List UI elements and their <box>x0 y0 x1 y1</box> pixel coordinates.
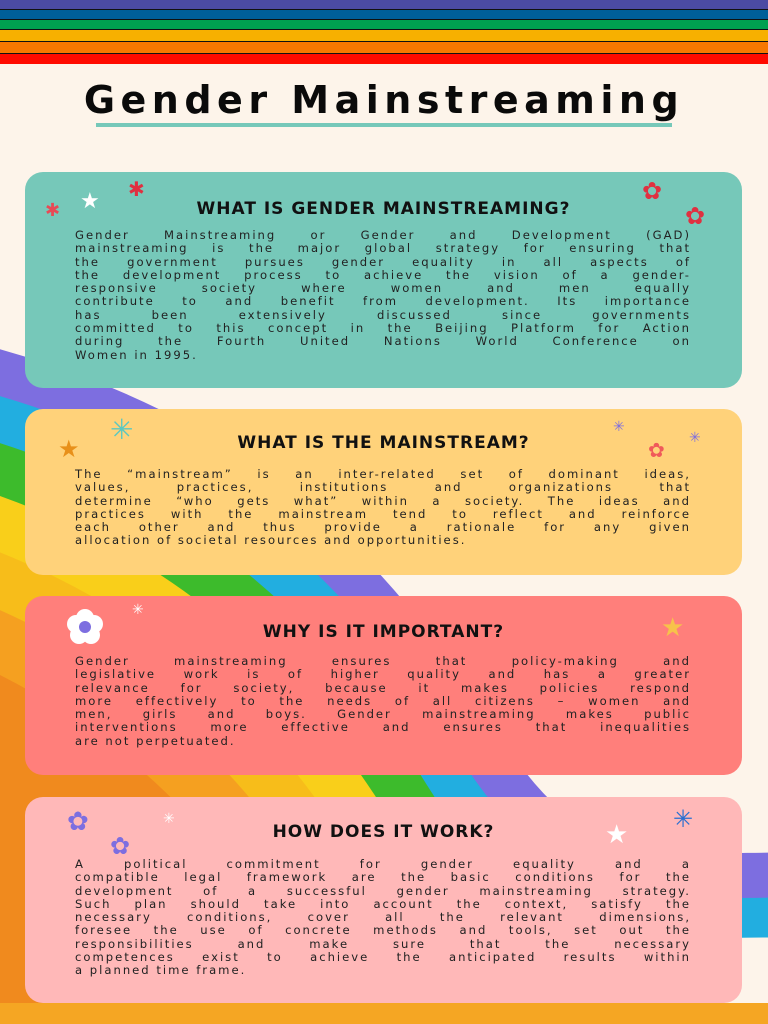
icon: decorations: ✿ <box>642 178 662 205</box>
text block: the government pursues gender equality in all aspects of <box>75 255 691 269</box>
text block <box>75 654 691 748</box>
text block: relevance for society, because it makes policies respond <box>75 681 691 695</box>
text block: contribute to and benefit from development. Its importance <box>75 294 691 308</box>
text block: Women in 1995. <box>75 348 198 362</box>
text block: more effectively to the needs of all citizens – women and <box>75 694 691 708</box>
icon: decorations: ★ <box>605 819 628 849</box>
icon: decorations: ✳ <box>110 414 133 445</box>
icon: decorations <box>67 601 684 644</box>
title underline <box>96 123 672 127</box>
panel: what is gender mainstreaming <box>25 172 742 388</box>
icon: decorations: ✳ <box>163 810 175 826</box>
text block: The “mainstream” is an inter-related set of dominant ideas, <box>75 467 691 481</box>
text block: mainstreaming is the major global strategy for ensuring that <box>75 241 691 255</box>
text block <box>75 857 691 977</box>
text block <box>74 467 691 547</box>
text block: practices with the mainstream tend to reflect and reinforce <box>75 507 691 521</box>
text block: Such plan should take into account the context, satisfy the <box>75 897 691 911</box>
text block: development of a successful gender mainstreaming strategy. <box>75 884 691 898</box>
text block: necessary conditions, cover all the relevant dimensions, <box>75 910 691 924</box>
text block: each other and thus provide a rationale for any given <box>75 520 691 534</box>
icon: decorations: ✳ <box>689 429 701 445</box>
text block: allocation of societal resources and opportunities. <box>75 533 466 547</box>
text block: interventions more effective and ensures that inequalities <box>75 720 691 734</box>
text block: compatible legal framework are the basic conditions for the <box>75 870 691 884</box>
heading: WHAT IS THE MAINSTREAM? <box>237 433 530 453</box>
text block: responsive society where women and men equally <box>75 281 691 295</box>
icon: decorations: ✿ <box>648 440 665 462</box>
text block: during the Fourth United Nations World Conference on <box>75 334 691 348</box>
text block <box>75 228 691 362</box>
text block: foresee the use of concrete methods and tools, set out the <box>75 923 691 937</box>
icon: decorations: ✿ <box>685 203 705 230</box>
text block: competences exist to achieve the anticipated results within <box>75 950 691 964</box>
icon: decorations: ★ <box>58 436 80 463</box>
text block: values, practices, institutions and organizations that <box>75 480 691 494</box>
icon: decorations: ✳ <box>673 806 693 833</box>
rainbow header stripes <box>0 0 768 64</box>
icon: decorations: ✳ <box>613 418 625 434</box>
panel: why is it important <box>25 596 742 775</box>
icon: decorations: ★ <box>80 188 100 213</box>
heading: HOW DOES IT WORK? <box>273 822 494 842</box>
icon: decorations: ✱ <box>128 179 145 201</box>
text block: men, girls and boys. Gender mainstreaming makes public <box>75 707 691 721</box>
icon: decorations: ✳ <box>132 601 144 617</box>
text block: Gender mainstreaming ensures that policy-making and <box>75 654 691 668</box>
text block: the development process to achieve the vision of a gender- <box>75 268 691 282</box>
icon: decorations: ★ <box>661 612 684 642</box>
text block: Gender Mainstreaming or Gender and Development (GAD) <box>75 228 691 242</box>
text block: are not perpetuated. <box>75 734 236 748</box>
icon: decorations: ✿ <box>110 833 130 860</box>
icon: decorations <box>67 806 693 860</box>
text block: committed to this concept in the Beijing Platform for Action <box>75 321 691 335</box>
icon: decorations: ✱ <box>45 200 60 220</box>
title: Gender Mainstreaming <box>84 78 684 122</box>
text block: has been extensively discussed since governments <box>75 308 691 322</box>
text block: responsibilities and make sure that the necessary <box>75 937 691 951</box>
icon: decorations <box>58 414 701 463</box>
text block: legislative work is of higher quality and has a greater <box>75 667 691 681</box>
text block: A political commitment for gender equality and a <box>75 857 691 871</box>
heading: WHY IS IT IMPORTANT? <box>263 622 504 642</box>
panel: what is the mainstream <box>25 409 742 575</box>
text block: determine “who gets what” within a society. The ideas and <box>75 494 691 508</box>
heading: WHAT IS GENDER MAINSTREAMING? <box>197 199 570 219</box>
icon: decorations <box>45 178 705 230</box>
panel: how does it work <box>25 797 742 1003</box>
text block: a planned time frame. <box>75 963 246 977</box>
icon: decorations: ✿ <box>67 806 89 836</box>
